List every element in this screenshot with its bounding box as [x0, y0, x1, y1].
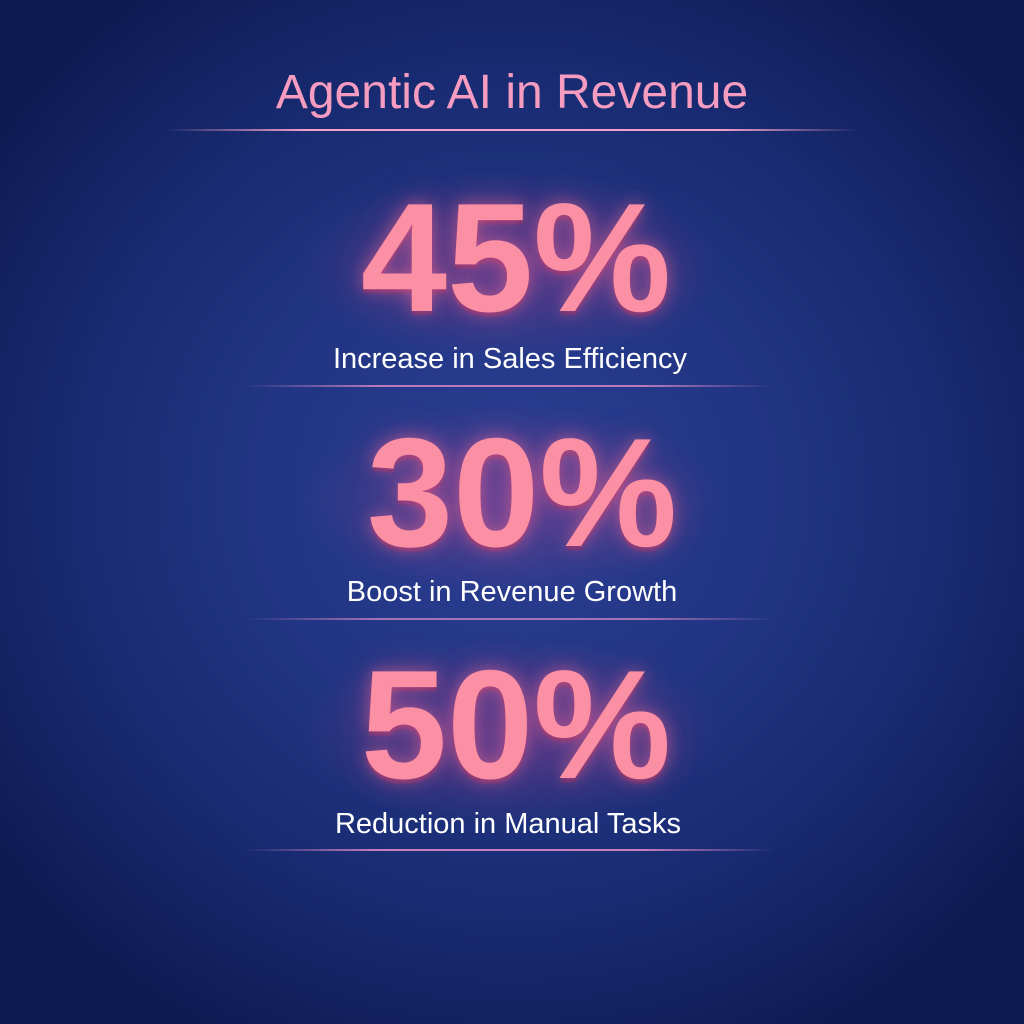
- label: manual tasks: Reduction in Manual Tasks: [335, 808, 681, 840]
- label: sales efficiency: Increase in Sales Efficiency: [333, 343, 687, 375]
- label: revenue growth: Boost in Revenue Growth: [347, 576, 677, 608]
- title: Agentic AI in Revenue: [276, 66, 748, 119]
- stat: 50%: 50%: [361, 638, 671, 811]
- stat: 45%: 45%: [361, 171, 671, 344]
- stat: 30%: 30%: [367, 406, 677, 579]
